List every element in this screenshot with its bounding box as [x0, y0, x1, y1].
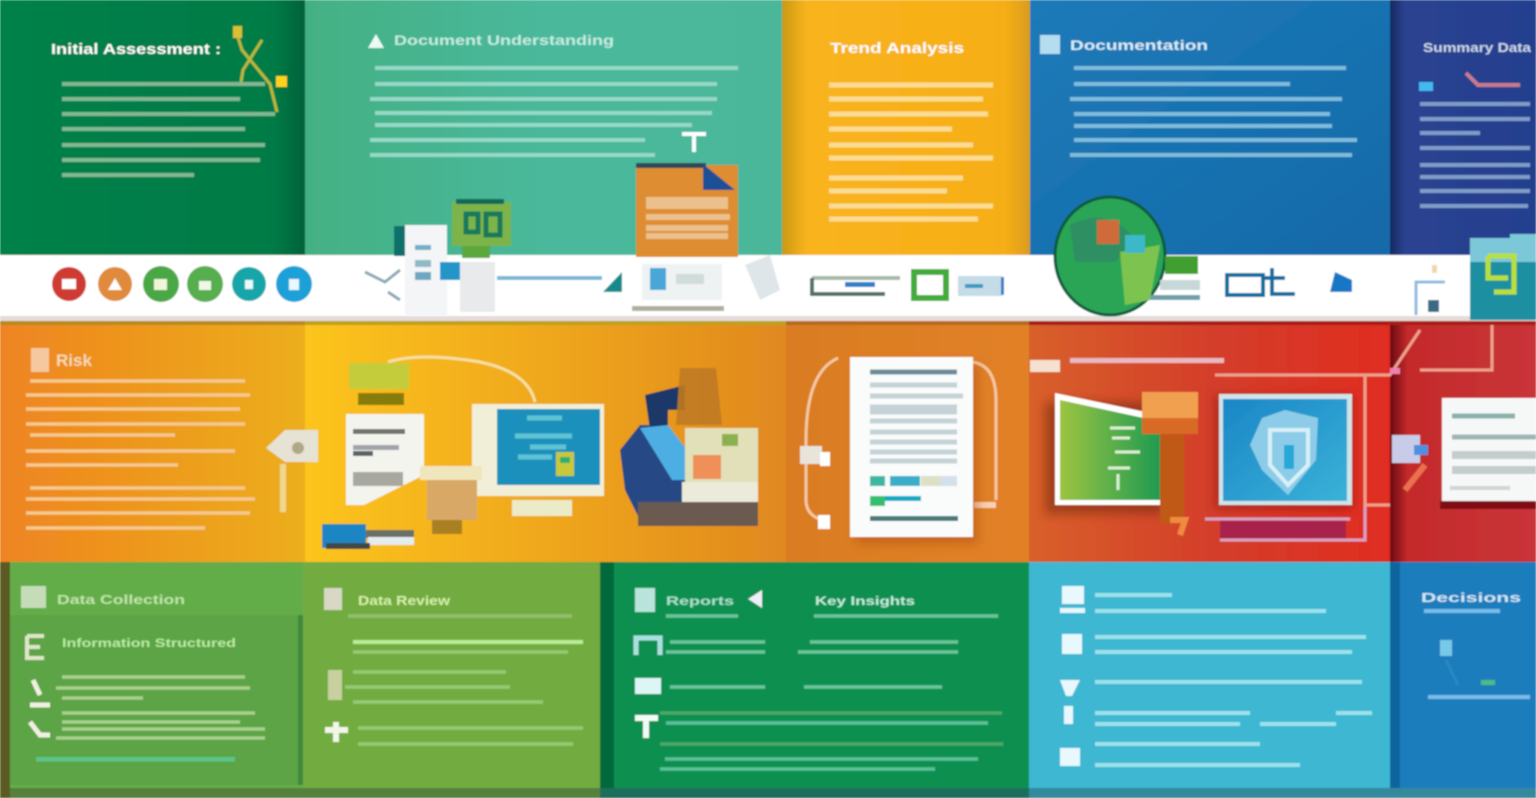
icon: B1: [324, 588, 342, 610]
icon: green speech sign: [394, 199, 511, 258]
icon: white clipboard: [365, 225, 495, 315]
heading: blue panel: Documentation: [1070, 37, 1208, 53]
text block: C lowest: [660, 723, 988, 769]
panel: middle row backgrounds: [0, 320, 1536, 564]
icon: band window and arrow: [603, 255, 780, 311]
icon: gray connector tag: [266, 430, 318, 512]
panel content: bottom blue E: [1421, 590, 1530, 697]
icon: small cursor: [682, 134, 706, 152]
text block: initial assessment body: [62, 84, 275, 175]
heading: C1: Reports: [666, 594, 734, 608]
icon: white sheet: [346, 414, 424, 505]
heading: C2: Key Insights: [815, 594, 915, 608]
icon: band chart and green box: [812, 272, 1004, 298]
document: report sheet: [850, 357, 978, 544]
text block: E: [1424, 611, 1530, 697]
panel content: bottom green C: [635, 588, 1003, 769]
heading: blue panel: [1040, 35, 1208, 54]
icons: B2: [325, 670, 348, 742]
icon: magenta bar: [1205, 505, 1365, 540]
text block: navy panel body: [1420, 104, 1530, 206]
text block: trend analysis body: [829, 85, 993, 219]
icon: monitor: [472, 404, 604, 516]
highlighted line: B: [353, 640, 583, 644]
icon: blue shield screen: [1216, 394, 1352, 508]
heading stub: red panel: [1030, 358, 1224, 372]
icon: green sheet: [1045, 393, 1163, 514]
icon: yellow network: [233, 26, 287, 112]
icon: band small doc: [1416, 265, 1445, 315]
text block: C body: [666, 616, 998, 687]
progress bar: A: [36, 757, 235, 762]
icon: green box: [349, 363, 409, 405]
heading: teal panel: [368, 32, 614, 48]
panel content: bottom green A: [21, 586, 265, 762]
heading: risk: [31, 348, 92, 372]
text block: teal panel body: [370, 68, 738, 155]
text block: D body: [1095, 595, 1372, 765]
heading: B: Data Review: [358, 593, 451, 608]
figure: seated person: [620, 368, 758, 526]
icon: small blue link: [1392, 435, 1428, 490]
heading: teal panel: Document Understanding: [394, 32, 614, 48]
icon: orange tag: [1142, 392, 1198, 524]
icon: A1: [21, 586, 46, 608]
icon: A2: [27, 636, 44, 658]
icon: navy small marker: [1419, 73, 1520, 91]
panel: top row backgrounds: [0, 0, 1536, 258]
text block: risk body: [26, 381, 255, 528]
text block: A body: [56, 677, 265, 738]
connector line: [497, 276, 602, 280]
heading: A: Data Collection: [57, 592, 185, 607]
icon: arrow: [748, 590, 762, 608]
icons: band blue window and note: [1227, 268, 1352, 295]
illustration: workstation: [322, 357, 758, 549]
panel: bottom row backgrounds: [0, 562, 1536, 798]
text block: blue panel body: [1070, 68, 1357, 155]
icon: C1: [635, 588, 655, 612]
panel content: bottom cyan D: [1060, 586, 1372, 766]
icons: six process circles: [52, 266, 312, 302]
icon: orange document: [636, 163, 738, 257]
text block: C lower: [660, 713, 1003, 744]
text block: B body: [348, 614, 572, 618]
text block: B lines: [345, 652, 583, 744]
icon: teal folder: [1470, 234, 1536, 320]
icon: green globe: [1055, 197, 1200, 315]
icon: cream box: [420, 466, 482, 534]
icon: E pin: [1440, 640, 1495, 685]
panel content: bottom lime B: [324, 588, 583, 744]
icons: D: [1060, 586, 1085, 766]
heading: trend analysis: Trend Analysis: [830, 40, 964, 57]
connector lines: red panel: [1170, 325, 1492, 535]
document: right sheet: [1440, 398, 1536, 509]
icon: left bracket arrows: [800, 358, 996, 529]
heading: initial assessment: Initial Assessment :: [51, 41, 221, 58]
icons: C2: [635, 638, 661, 738]
icon: laptop: [322, 524, 414, 549]
heading: risk: Risk: [56, 351, 92, 370]
panel: white icon band: [0, 255, 1536, 325]
heading: E: Decisions: [1421, 590, 1521, 605]
dotted connector curve: [388, 357, 535, 402]
heading: navy panel: Summary Data: [1423, 40, 1532, 55]
icons: A3: [30, 680, 50, 735]
subheading: A: Information Structured: [62, 636, 236, 650]
